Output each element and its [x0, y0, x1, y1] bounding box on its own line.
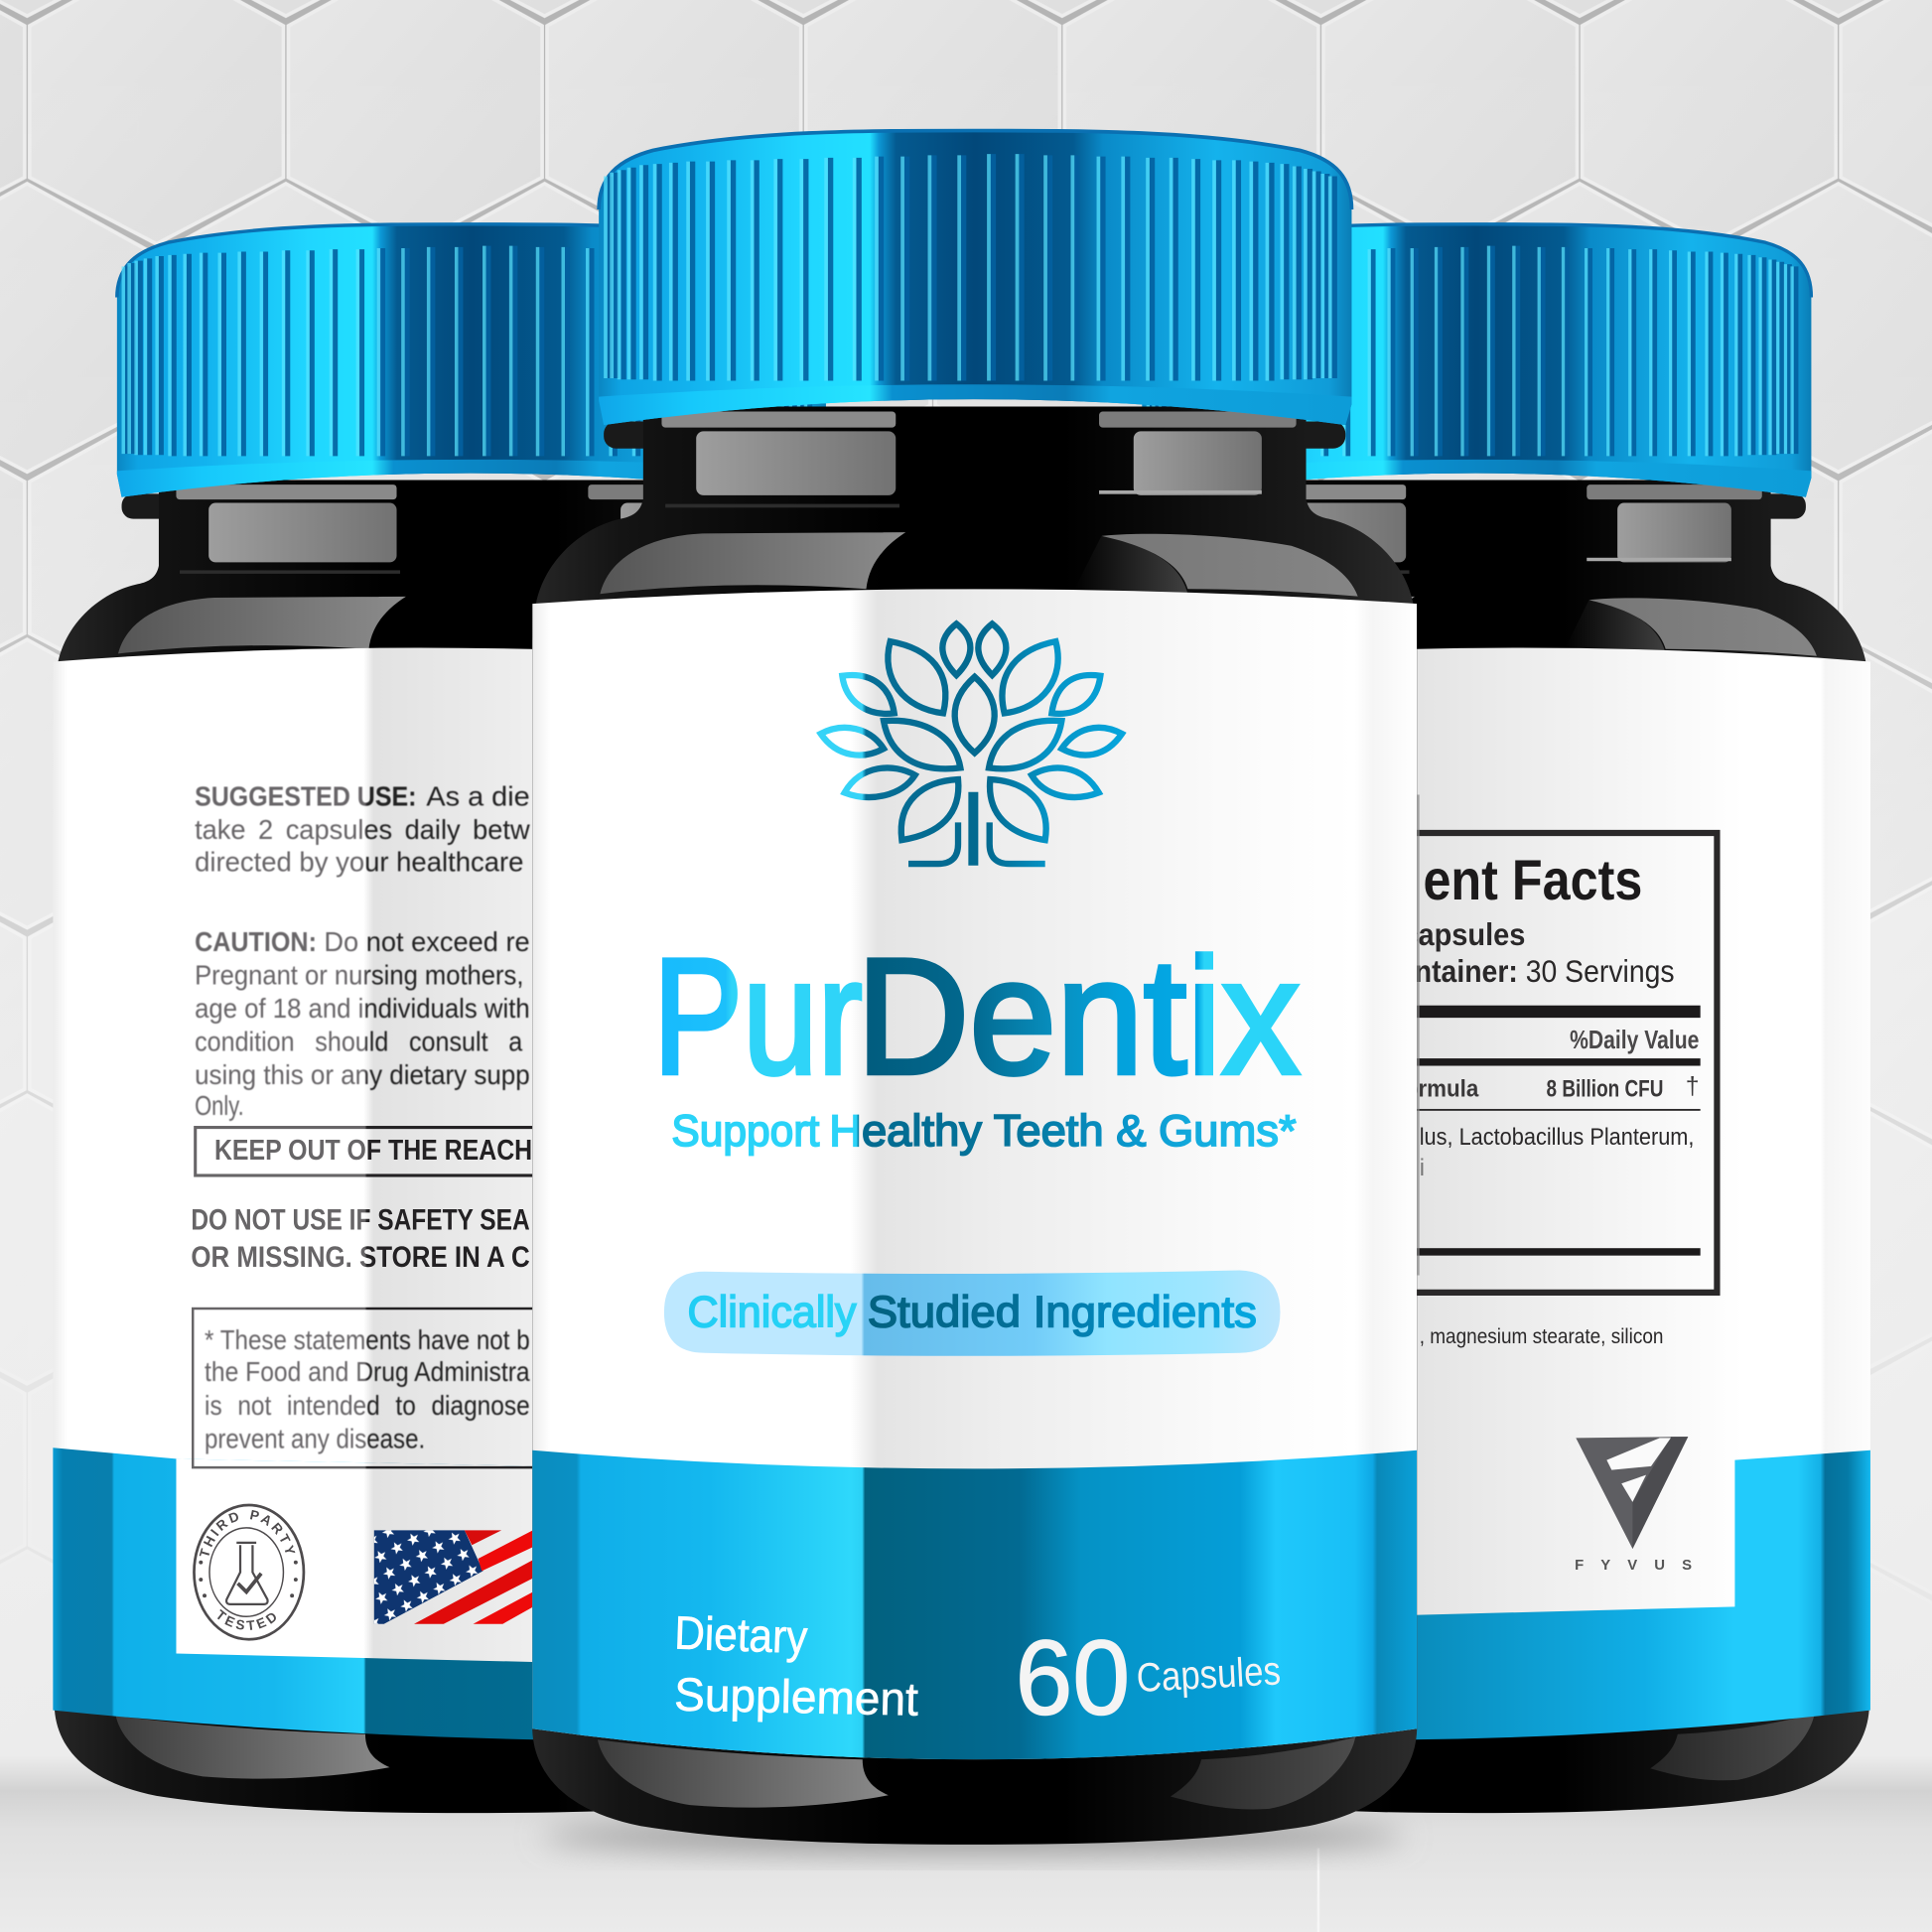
right blue band — [1405, 1450, 1870, 1739]
dietary supplement text: Supplement — [674, 1668, 918, 1725]
clinically studied pill: Studied Ingredients — [868, 1289, 1257, 1337]
fyvus logo: FYVUS — [1575, 1558, 1692, 1574]
caution text: age of 18 and individuals with — [195, 993, 530, 1024]
formula row: † — [1686, 1073, 1700, 1100]
FDA disclaimer box: * These statements have not b — [205, 1324, 530, 1355]
suggested use text — [195, 781, 530, 877]
left bottle: back panel with directions — [53, 222, 826, 1813]
other ingredients line: , magnesium stearate, silicon — [1420, 1325, 1663, 1348]
tree logo — [821, 623, 1122, 866]
american flag — [374, 1525, 542, 1624]
safety seal warning: DO NOT USE IF SAFETY SEA — [191, 1204, 530, 1237]
shadow line on right label — [1417, 794, 1420, 1276]
ingredient list: lus, Lactobacillus Planterum, — [1420, 1124, 1694, 1150]
capsule count: 60 — [1016, 1617, 1130, 1736]
servings per container: ntainer: 30 Servings — [1415, 954, 1675, 989]
icon: flask with check — [226, 1543, 268, 1604]
tagline: Support — [671, 1107, 820, 1156]
right white panel — [1405, 1453, 1734, 1615]
caution text: Do not exceed re — [324, 926, 530, 957]
brand name — [653, 924, 1300, 1109]
center label — [532, 567, 1417, 1799]
supplement facts table: i — [1420, 1155, 1425, 1180]
third party tested badge: TESTED — [217, 1608, 276, 1630]
formula row: 8 Billion CFU — [1547, 1076, 1663, 1102]
left label background — [53, 647, 542, 1466]
caution text — [195, 926, 530, 1121]
FDA disclaimer box: prevent any disease. — [205, 1423, 425, 1453]
third party tested badge: THIRD PARTY — [199, 1509, 296, 1557]
supplement facts table — [1402, 833, 1717, 1293]
third party tested badge — [193, 1503, 306, 1641]
caution text: Only. — [195, 1090, 244, 1121]
keep out of reach box: KEEP OUT OF THE REACH — [214, 1135, 532, 1167]
left blue band — [53, 1448, 542, 1739]
formula row — [1405, 1073, 1700, 1102]
caution text: condition should consult a — [195, 1027, 523, 1057]
daily value header: %Daily Value — [1570, 1025, 1699, 1054]
formula row: ormula — [1405, 1076, 1479, 1102]
capsule count — [1016, 1617, 1282, 1736]
fyvus logo — [1575, 1437, 1692, 1574]
clinically studied pill: Clinically — [688, 1289, 857, 1337]
suggested use text: SUGGESTED USE: — [195, 781, 416, 812]
keep out of reach box — [196, 1128, 553, 1175]
safety seal warning — [191, 1204, 530, 1274]
caution text: using this or any dietary supp — [195, 1059, 530, 1090]
FDA disclaimer box: the Food and Drug Administra — [205, 1356, 530, 1387]
floor and bottle shadow — [0, 1756, 1932, 1932]
center bottle: front label — [532, 131, 1420, 1845]
suggested use text: directed by your healthcare — [195, 846, 523, 877]
brand name: Pur — [653, 924, 863, 1109]
left bottle cap and glass — [55, 224, 888, 1813]
dietary supplement text: Dietary — [674, 1606, 809, 1663]
right bottle cap and glass — [1083, 224, 1869, 1813]
right label background — [1405, 647, 1870, 1472]
safety seal warning: OR MISSING. STORE IN A C — [191, 1241, 530, 1274]
left white panel — [176, 1458, 542, 1662]
dietary supplement text — [674, 1606, 918, 1725]
center blue band — [532, 1449, 1418, 1759]
suggested use text: take 2 capsules daily betw — [195, 814, 530, 845]
table heading: ent Facts — [1423, 849, 1642, 912]
caution text: Pregnant or nursing mothers, — [195, 960, 523, 991]
center bottle cap and glass — [532, 131, 1417, 1845]
brand name: Dentix — [857, 924, 1300, 1109]
FDA disclaimer box — [193, 1309, 550, 1467]
serving size: capsules — [1402, 917, 1525, 952]
capsule count: Capsules — [1136, 1647, 1282, 1701]
right bottle: supplement facts panel — [1083, 224, 1870, 1813]
caution text: CAUTION: — [195, 926, 317, 957]
clinically studied pill — [664, 1271, 1280, 1356]
FDA disclaimer box: is not intended to diagnose — [205, 1390, 530, 1421]
suggested use text: As a die — [426, 781, 530, 812]
tagline: Healthy Teeth & Gums* — [829, 1107, 1297, 1156]
